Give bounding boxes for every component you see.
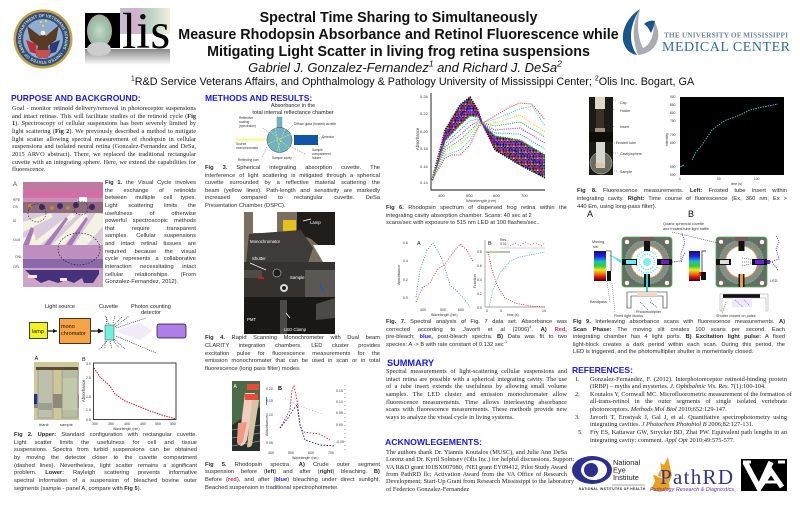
figure 9A: integrating chamber, scan phase diagram: A <box>587 209 593 219</box>
figure 8 right: fluorescence time course chart: 700 <box>670 133 676 137</box>
summary text: Spectral measurements of light-scattering cellular suspensions and <box>386 368 567 375</box>
figure 5B: rhodopsin spectra chart: 500 <box>288 451 294 455</box>
figure 6: rhodopsin spectrum chart: 0.24 <box>420 94 429 99</box>
figure 3: spherical integrating cuvette diagram: Detector <box>322 135 335 139</box>
acknowledgements text: Lorenz and Dr. Kyril Solntsev (Olis Inc.) for helpful discussions. Support: <box>386 456 574 463</box>
logo: National Eye Institute: Institute <box>613 473 639 482</box>
heading: summary: SUMMARY <box>387 358 434 368</box>
figure 9A: integrating chamber, scan phase diagram <box>587 209 685 318</box>
figure 3: spherical integrating cuvette diagram: coating <box>239 120 250 124</box>
figure 5A: rhodopsin suspension tubes photo: A <box>234 384 238 390</box>
figure 3: spherical integrating cuvette diagram: (spectralon) <box>239 124 256 128</box>
figure 2 caption: problem. Lower: Rayleigh scattering prevents informative <box>14 470 197 476</box>
figure 5B: rhodopsin spectra chart: 0.15 <box>336 389 343 393</box>
figure 7B: species kinetics chart: 0.8 <box>477 250 482 254</box>
figure 6: rhodopsin spectrum chart: Wavelength (nm) <box>466 198 497 203</box>
figure 9B: integrating chamber, excitation light pulse diagram: Quartz spherical cuvette <box>663 222 704 226</box>
reference list: integrating cavity: comment. Appl Opt 2010;49:575-577. <box>590 437 735 444</box>
figure 7B: species kinetics chart: B <box>488 241 492 247</box>
figure 3 caption: Fig 3. Spherical integrating absorption cuvette. The <box>205 165 380 171</box>
figure 4: rapid scanning monochromator photo: Sample <box>290 275 305 280</box>
figure 9 caption: Fig 9. Interleaving absorbance scans with fluorescence measurements. A) <box>573 319 785 325</box>
summary text: samples. The LED cluster and emission monochromater allow <box>386 391 567 398</box>
summary text <box>386 368 567 421</box>
figure 1 caption: the exchange of retinoids <box>105 188 196 194</box>
figure 1: retina histology photo <box>23 182 103 287</box>
figure 1 caption: Light scattering limits the <box>105 203 196 209</box>
figure 2: spectrophotometer schematic with rectangular cuvette: Light source <box>45 304 75 310</box>
figure 2A: cuvette photo: blank <box>39 422 49 427</box>
figure 8 caption: Fig 8. Fluorescence measurements. Left: Frosted tube insert within <box>577 188 787 194</box>
figure 1: panel and layer labels: OLM <box>13 238 21 242</box>
figure 2A: cuvette photo: sample <box>60 422 74 427</box>
figure 7B: species kinetics chart: 0 <box>486 309 488 313</box>
figure 5B: rhodopsin spectra chart: 0.20 <box>266 387 273 391</box>
figure 1: panel and layer labels: IS <box>13 219 17 223</box>
figure 9B: integrating chamber, excitation light pulse diagram: LED <box>770 279 778 283</box>
figure 1: panel and layer labels: OPL <box>13 265 20 269</box>
figure 3 caption: increased compared to rectangular cuvette. DeSa <box>205 195 380 201</box>
figure 5 caption: suspension before (left) and after (right) bleaching. B) <box>205 469 380 475</box>
figure 5B: rhodopsin spectra chart: 0.05 <box>336 411 343 415</box>
figure 3: spherical integrating cuvette diagram: compartment <box>312 152 331 156</box>
logo: Olis: lis <box>122 4 170 60</box>
figure 9B: integrating chamber, excitation light pulse diagram <box>663 209 779 318</box>
purpose and background text: Goal - monitor retinoid delivery/removal in photoreceptor suspensions <box>12 105 196 112</box>
figure 3: spherical integrating cuvette diagram: Reflective <box>239 116 253 120</box>
figure 3 caption <box>205 165 380 209</box>
title: Spectral Time Sharing to Simultaneously <box>260 10 537 26</box>
figure 2 caption: segments (sample - panel A, compare with Fig 5). <box>14 486 141 492</box>
figure 7B: species kinetics chart: 10 <box>542 309 546 313</box>
figure 3: spherical integrating cuvette diagram: monochromator <box>236 146 259 150</box>
authors: Gabriel J. Gonzalez-Fernandez1 and Richard J. DeSa2 <box>248 59 562 75</box>
figure 2B: absorbance chart: 3.0 <box>86 362 91 366</box>
figure 2 caption: by moving the detector closer to the cuvette compartment <box>14 455 197 461</box>
figure 3: spherical integrating cuvette diagram: Absorbance in the <box>271 103 315 109</box>
reference list: 1. <box>575 376 580 382</box>
figure 8 right: fluorescence time course chart: Intensity <box>665 133 669 146</box>
figure 7B: species kinetics chart: 0.4 <box>477 278 482 282</box>
figure 8 caption <box>577 188 787 210</box>
figure 4 caption: excitation pulse for fluorescence measurements for the <box>205 351 380 357</box>
figure 1: panel and layer labels <box>13 182 22 269</box>
figure 2: spectrophotometer schematic with rectangular cuvette: Cuvette <box>99 304 118 310</box>
figure 2 caption: spectral information of a suspension of bleached bovine outer <box>14 478 197 484</box>
figure 7A: spectral analysis chart: Absorbance <box>397 265 401 285</box>
title: Mitigating Light Scatter in living frog retina suspensions <box>207 44 590 60</box>
figure 2 caption: Fig 2. Upper: Standard configuration with rectangular cuvette. <box>14 432 197 438</box>
figure 5B: rhodopsin spectra chart: B <box>278 386 282 392</box>
title <box>178 10 619 60</box>
figure 3: spherical integrating cuvette diagram: Sample <box>312 148 323 152</box>
purpose and background text: suspensions and isolated neural retina (Gonzalez-Fernandez and DeSa, <box>12 143 196 150</box>
figure 7 caption <box>386 319 567 348</box>
figure 2B: absorbance chart: Wavelength (nm) <box>113 427 140 431</box>
figure 3 caption: interference of light scattering is mitigated through a spherical <box>205 173 380 179</box>
figure 2B: absorbance chart: 400 <box>124 422 130 426</box>
summary text: fluorescence measurements. Time allows interleaving absorbance <box>386 399 567 406</box>
figure 7 caption: corrected according to Javorfi et al (2006)4. A) Red, <box>386 325 567 333</box>
acknowledgements text: The authors thank Dr. Yiannis Koutalos (MUSC), and Julie Ann DeSa <box>386 449 567 456</box>
figure 2 caption <box>14 432 197 492</box>
figure 6 caption <box>386 205 567 226</box>
figure 2B: absorbance chart: 550 <box>170 422 176 426</box>
title: Measure Rhodopsin Absorbance and Retinol Fluorescence while <box>178 26 619 42</box>
figure 5B: rhodopsin spectra chart: 0.15 <box>266 399 273 403</box>
figure 5B: rhodopsin spectra chart: 0.05 <box>266 441 273 445</box>
figure 3: spherical integrating cuvette diagram: Sample cavity <box>272 156 292 160</box>
summary text: scans with fluorescence measurements. These methods provide new <box>386 406 567 413</box>
figure 5B: rhodopsin spectra chart: 0.00 <box>336 423 343 427</box>
figure 5B: rhodopsin spectra chart: 0.10 <box>266 413 273 417</box>
figure 4 caption: CLARITY integration chambers. LED cluster provides <box>205 343 380 349</box>
figure 7B: species kinetics chart: Fraction <box>473 274 477 288</box>
figure 2: spectrophotometer schematic with rectangular cuvette: mono <box>61 324 75 330</box>
figure 1 caption <box>105 180 196 285</box>
reference list: all-trans-retinol in the outer segments of single isolated vertebrate <box>590 398 787 405</box>
figure 3 caption: Presentation Chamber (DSPC). <box>205 203 286 209</box>
figure 7B: species kinetics chart: 0.2 <box>477 292 482 296</box>
figure 1: panel and layer labels: OS <box>13 205 19 209</box>
figure 3: spherical integrating cuvette diagram: Reflecting port <box>238 158 259 162</box>
purpose and background text <box>12 105 196 173</box>
figure 8 left: frosted tube insert photo: Cap <box>620 101 627 105</box>
figure 1 caption: that require transparent <box>105 226 196 232</box>
figure 2B: absorbance chart: 450 <box>140 422 146 426</box>
figure 9A: integrating chamber, scan phase diagram: Bandpass <box>590 300 607 304</box>
figure 5 caption: Before (red), and after (blue) bleaching under direct sunlight. <box>205 477 380 483</box>
figure 7A: spectral analysis chart: 0.0 <box>403 296 408 300</box>
figure 4 caption <box>205 335 380 372</box>
figure 3: spherical integrating cuvette diagram: total internal reflectance chamber <box>252 110 334 116</box>
figure 9B: integrating chamber, excitation light pulse diagram: and frosted-tube light baffle <box>663 227 709 231</box>
purpose and background text: 2015 ARVO abstract). There, we replaced the traditional rectangular <box>12 151 196 158</box>
figure 2B: absorbance chart: 1.0 <box>86 408 91 412</box>
figure 2B: absorbance chart: Absorbance <box>81 379 86 402</box>
reference list: 5. <box>578 429 583 436</box>
figure 7A: spectral analysis chart: A <box>417 241 421 247</box>
figure 4: rapid scanning monochromator photo: Shutter <box>252 256 266 261</box>
figure 7A: spectral analysis chart: 0.2 <box>403 278 408 282</box>
heading: acknowledgements: ACKNOWLEGEMENTS: <box>385 437 482 447</box>
logo: VA <box>741 459 787 491</box>
figure 8 right: fluorescence time course chart: 100 <box>754 177 760 181</box>
logo: National Eye Institute: Eye <box>613 466 626 474</box>
purpose and background text: light scattering (Fig 2). We previously described a method to mitigate <box>12 128 196 135</box>
figure 2 caption: Light scatter limits the usefulness for cell and tissue <box>14 440 197 446</box>
figure 7A: spectral analysis chart: 0.4 <box>403 259 408 263</box>
figure 2: spectrophotometer schematic with rectangular cuvette: detector <box>141 310 161 316</box>
logo: PathRD <box>650 457 734 493</box>
figure 7A: spectral analysis chart: 0.6 <box>403 241 408 245</box>
figure 9B: integrating chamber, excitation light pulse diagram: Shutter closed on pulse <box>716 314 756 318</box>
figure 8 right: fluorescence time course chart <box>665 95 784 186</box>
figure 1 caption: usefulness of otherwise <box>105 211 196 217</box>
figure 5B: rhodopsin spectra chart: 400 <box>268 451 274 455</box>
figure 2: spectrophotometer schematic with rectangular cuvette: Photon counting <box>131 304 171 310</box>
logo: National Eye Institute: NATIONAL INSTITUTES OF HEALTH <box>579 487 646 491</box>
figure 8 right: fluorescence time course chart: 0 <box>679 177 681 181</box>
figure 9 caption <box>573 319 785 355</box>
figure 2 caption: (dashed lines). Nevertheless, light scatter remains a significant <box>14 463 197 469</box>
summary text: intact retina are possible with a spherical integrating cavity. The use <box>386 376 567 383</box>
figure 4 caption: fluorescence (long pass filter) modes. <box>205 366 301 372</box>
figure 1 caption: cycle represents a collaborative <box>105 256 196 262</box>
reference list: Gonzalez-Fernandez, F. (2012). Interphotoreceptor retinoid-binding protein <box>590 376 787 382</box>
figure 2: spectrophotometer schematic with rectangular cuvette: lamp <box>32 329 44 335</box>
reference list <box>575 376 792 444</box>
figure 4 caption: Fig 4. Rapid Scanning Monochrometer with Dual beam <box>205 335 380 341</box>
figure 8 caption: integrating cavity. Right: Time course of fluorescence (Ex, 360 nm; Ex > <box>577 196 787 202</box>
figure 8 right: fluorescence time course chart: 650 <box>670 141 676 145</box>
figure 7 caption: species: A -> B with rate constant of 0.132 sec-1 <box>386 340 507 348</box>
figure 3 caption: cuvette surrounded by a reflective material scattering the <box>205 180 380 186</box>
figure 2B: absorbance chart: 500 <box>155 422 161 426</box>
figure 2: spectrophotometer schematic with rectangular cuvette: chromator <box>61 331 86 337</box>
figure 4: rapid scanning monochromator photo: Monochromator <box>250 239 281 244</box>
figure 5B: rhodopsin spectra chart: Absorbance <box>265 416 269 436</box>
figure 8 right: fluorescence time course chart: 900 <box>670 95 676 99</box>
figure 2 caption: suspensions. Spectra from turbid suspensions can be obtained <box>14 447 197 453</box>
figure 1 caption: between multiple cell types. <box>105 195 196 201</box>
acknowledgements text <box>386 449 574 493</box>
logo: National Eye Institute: National <box>613 458 640 467</box>
figure 1 caption: powerful spectroscopic methods <box>105 218 196 224</box>
figure 5B: rhodopsin spectra chart: Wavelength (nm) <box>292 456 319 460</box>
figure 7A: spectral analysis chart: 400 <box>420 308 426 312</box>
logo: University of Mississippi Medical Center: MEDICAL CENTER <box>662 40 791 55</box>
figure 2: spectrophotometer schematic with rectangular cuvette <box>30 304 186 353</box>
figure 2B: absorbance chart: 0.5 <box>86 418 91 422</box>
acknowledgements text: of Federico Gonzalez-Fernandez <box>386 486 469 493</box>
figure 2B: absorbance chart: 1.5 <box>86 395 91 399</box>
figure 6: rhodopsin spectrum chart: 500 <box>466 193 473 198</box>
figure 7B: species kinetics chart: 0.6 <box>477 264 482 268</box>
figure 3: spherical integrating cuvette diagram <box>236 103 336 162</box>
logo: University of Mississippi Medical Center <box>623 9 791 55</box>
figure 8 left: frosted tube insert photo <box>589 97 642 175</box>
reference list: 2. <box>575 391 580 398</box>
figure 2A: cuvette photo <box>34 356 79 427</box>
figure 6: rhodopsin spectrum chart: 0.16 <box>420 164 429 169</box>
purpose and background text: and intact retinas. This will facilitate studies of the retinoid cycle (Fig <box>12 113 196 120</box>
figure 5B: rhodopsin spectra chart <box>265 385 345 460</box>
reference list: Fry ES, Kattawar GW, Strycker BD, Zhai PW. Equivalent path lengths in an <box>590 429 787 436</box>
figure 8 right: fluorescence time course chart: 800 <box>670 111 676 115</box>
purpose and background text: fluorescence. <box>12 166 46 173</box>
figure 2B: absorbance chart: 350 <box>108 422 114 426</box>
figure 8 right: fluorescence time course chart: 750 <box>670 119 676 123</box>
figure 7A: spectral analysis chart: Wavelength (nm) <box>431 313 458 317</box>
figure 5B: rhodopsin spectra chart: -0.05 <box>336 440 344 444</box>
figure 9 caption: LED is triggered, and the photomultiplier shutter is momentarily closed. <box>573 349 753 355</box>
figure 4: rapid scanning monochromator photo: PMT <box>247 317 256 322</box>
figure 6: rhodopsin spectrum chart: 0.18 <box>420 146 429 151</box>
figure 9B: integrating chamber, excitation light pulse diagram: B <box>688 209 694 219</box>
figure 2A: cuvette photo: A <box>34 356 38 362</box>
figure 4 caption: emission monochromater that can be used in scan or in total <box>205 358 380 364</box>
figure 3: spherical integrating cuvette diagram: Diffuse glass (frosted) cuvette <box>294 122 336 126</box>
figure 7B: species kinetics chart <box>473 238 546 317</box>
figure 1: panel and layer labels: ONL <box>15 255 22 259</box>
figure 7 caption: pre-bleach; blue, post-bleach spectra. B) Data was fit to two <box>386 334 567 340</box>
figure 5B: rhodopsin spectra chart: 600 <box>308 451 314 455</box>
logo: Department of Veterans Affairs seal <box>14 10 72 68</box>
figure 5 caption: Beached suspension in traditional spectrophotmeter. <box>205 485 339 491</box>
figure 9A: integrating chamber, scan phase diagram: slit <box>593 245 599 249</box>
figure 7B: species kinetics chart: 5 <box>500 309 502 313</box>
heading: purpose and background: PURPOSE AND BACKGROUND: <box>11 93 141 103</box>
figure 7B: species kinetics chart: 0.0 <box>477 306 482 310</box>
figure 2B: absorbance chart: 300 <box>92 422 98 426</box>
figure 8 left: frosted tube insert photo: Insert <box>620 125 629 129</box>
logo: PathRD: Pathology Research & Diagnostics <box>650 487 734 493</box>
figure 3 caption: beam (yellow lines). Path-length and sensitivity are markedly <box>205 188 380 194</box>
acknowledgements text: from PathRD llc; Activation Award from the VA Office of Research <box>386 471 567 478</box>
logo: PathRD: PathRD <box>660 465 733 489</box>
figure 7A: spectral analysis chart <box>397 241 473 317</box>
figure 8 left: frosted tube insert photo: Sample <box>620 170 632 174</box>
figure 1: panel and layer labels: RPE <box>13 198 21 202</box>
figure 4: rapid scanning monochromator photo: LED Clamp <box>284 327 307 332</box>
reference list: Koutalos Y, Cornwall MC. Microfluorometric measurement of the formation of <box>590 391 792 398</box>
figure 1 caption: cellular relationships. (From <box>105 272 196 278</box>
figure 8 left: frosted tube insert photo: Holder <box>620 109 631 113</box>
figure 5 caption <box>205 462 380 491</box>
heading: references: REFERENCES: <box>572 365 633 375</box>
figure 9 caption: light-block creates a dark period within each scan. During this period, the <box>573 342 785 348</box>
figure 6 caption: integrating cavity absorption chamber. Scans: 40 sec at 2 <box>386 213 532 219</box>
figure 1: panel and layer labels: A <box>13 182 17 188</box>
figure 8 right: fluorescence time course chart: 500 <box>670 173 676 177</box>
figure 9 caption: Scan Phase: The moving slit creates 100 scans per second. Each <box>573 327 785 333</box>
acknowledgements text: Development; Start-Up Grant from Research Mississippi to the laboratory <box>386 478 574 485</box>
figure 1 caption: interaction necessitating intact <box>105 264 196 270</box>
figure 6: rhodopsin spectrum chart: Absorbance <box>415 127 420 150</box>
figure 5 caption: Fig 5. Rhodopsin spectra. A) Crude outer segment <box>205 462 380 468</box>
figure 5B: rhodopsin spectra chart: 700 <box>328 451 334 455</box>
figure 1 caption: Gonzalez-Fernandez, 2012). <box>105 279 178 285</box>
figure 9A: integrating chamber, scan phase diagram: Photomultiplier <box>636 310 662 314</box>
reference list: (IRBP) – myths and mysteries. J. Ophthalmic Vis. Res. 7(1):100-104. <box>590 383 766 390</box>
logo: Olis <box>85 4 170 65</box>
figure 8 left: frosted tube insert photo: Cavity/sphere <box>620 152 642 156</box>
purpose and background text: light scatter allowing spectral measurement of rhodopsin in cellular <box>12 136 196 143</box>
figure 7B: species kinetics chart: 0.01 <box>500 242 507 246</box>
figure 6: rhodopsin spectrum chart: 0.22 <box>420 111 429 116</box>
reference list: photoreceptors. Methods Mol Biol 2010;652:129-147. <box>590 406 727 413</box>
acknowledgements text: VA R&D grant I01BX007080, /NEI grant EY09412, Pilot Study Award <box>386 464 567 471</box>
reference list: 3. <box>575 414 580 421</box>
figure 8 right: fluorescence time course chart: 50 <box>717 177 721 181</box>
figure 5A: rhodopsin suspension tubes photo <box>232 381 260 451</box>
figure 8 right: fluorescence time course chart: 850 <box>670 103 676 107</box>
figure 6 caption: scans/sec with exposure to 515 nm LED at 100 flashes/sec.. <box>386 220 540 226</box>
figure 8 left: frosted tube insert photo: Frosted tube <box>616 141 636 145</box>
figure 2B: absorbance chart: B <box>82 357 86 363</box>
summary text: ways to analyze the visual cycle in living systems. <box>386 414 514 421</box>
figure 1 caption: and intact retinal tissues are <box>105 241 196 247</box>
figure 6: rhodopsin spectrum chart <box>415 93 545 203</box>
affiliations: 1R&D Service Veterans Affairs, and Ophthalmology & Pathology University of Mississippi Center; 2Olis Inc. Bogart, GA <box>131 75 694 88</box>
figure 3: spherical integrating cuvette diagram: holder <box>312 156 322 160</box>
summary text: of a tube insert extends the usefulness by allowing small volume <box>386 383 567 390</box>
heading: methods and results: METHODS AND RESULTS: <box>205 93 312 103</box>
reference list: Javorfi T, Erostyak J, Gal J, et al. Quantitative spectrophotometry using <box>590 414 787 421</box>
figure 7B: species kinetics chart: Res. <box>500 238 507 242</box>
figure 6 caption: Fig 6. Rhodopsin spectrum of dispersed frog retina within the <box>386 205 567 211</box>
figure 9 caption: integrating chamber has 4 light ports. B) Excitation light pulse: A fixed <box>573 334 785 340</box>
figure 8 right: fluorescence time course chart: 550 <box>670 165 676 169</box>
figure 5B: rhodopsin spectra chart: 0.10 <box>336 400 343 404</box>
figure 4: rapid scanning monochromator photo <box>244 212 335 334</box>
purpose and background text: cuvette with an integrating sphere. Here, we extend the capabilities for <box>12 159 196 166</box>
figure 6: rhodopsin spectrum chart: 600 <box>493 193 500 198</box>
figure 8 caption: 440 Em, using long-pass filter). <box>577 204 656 210</box>
figure 1 caption: samples. Cellular suspensions <box>105 233 196 239</box>
reference list: integrating cavities. J Photochem Photobiol B 2006;82:127-131. <box>590 421 754 428</box>
figure 9A: integrating chamber, scan phase diagram: Moving <box>592 240 604 244</box>
figure 2B: absorbance chart <box>81 357 176 431</box>
figure 4: rapid scanning monochromator photo: Lamp <box>310 220 321 225</box>
figure 3: spherical integrating cuvette diagram: Source <box>236 142 246 146</box>
figure 7A: spectral analysis chart: 600 <box>458 308 464 312</box>
figure 9A: integrating chamber, scan phase diagram: Fixed light blocks <box>614 314 643 318</box>
purpose and background text: 1). Spectroscopy of cellular suspensions has been severely limited by <box>12 120 196 127</box>
logo: National Eye Institute <box>572 456 646 491</box>
figure 7 caption: Fig. 7. Spectral analysis of Fig. 7 data set. Absorbance was <box>386 319 567 325</box>
figure 7B: species kinetics chart: time (s) <box>507 313 519 317</box>
figure 6: rhodopsin spectrum chart: 400 <box>438 193 445 198</box>
figure 7A: spectral analysis chart: 500 <box>440 308 446 312</box>
figure 1 caption: Fig 1. the Visual Cycle involves <box>105 180 196 186</box>
figure 8 right: fluorescence time course chart: time (s) <box>731 182 742 186</box>
logo: University of Mississippi Medical Center: THE UNIVERSITY OF MISSISSIPPI <box>664 30 788 40</box>
figure 1 caption: required because the visual <box>105 249 196 255</box>
figure 2B: absorbance chart: 2.5 <box>86 376 91 380</box>
figure 6: rhodopsin spectrum chart: 0.20 <box>420 129 429 134</box>
figure 6: rhodopsin spectrum chart: 700 <box>521 193 528 198</box>
figure 6: rhodopsin spectrum chart: 0.14 <box>420 180 429 185</box>
